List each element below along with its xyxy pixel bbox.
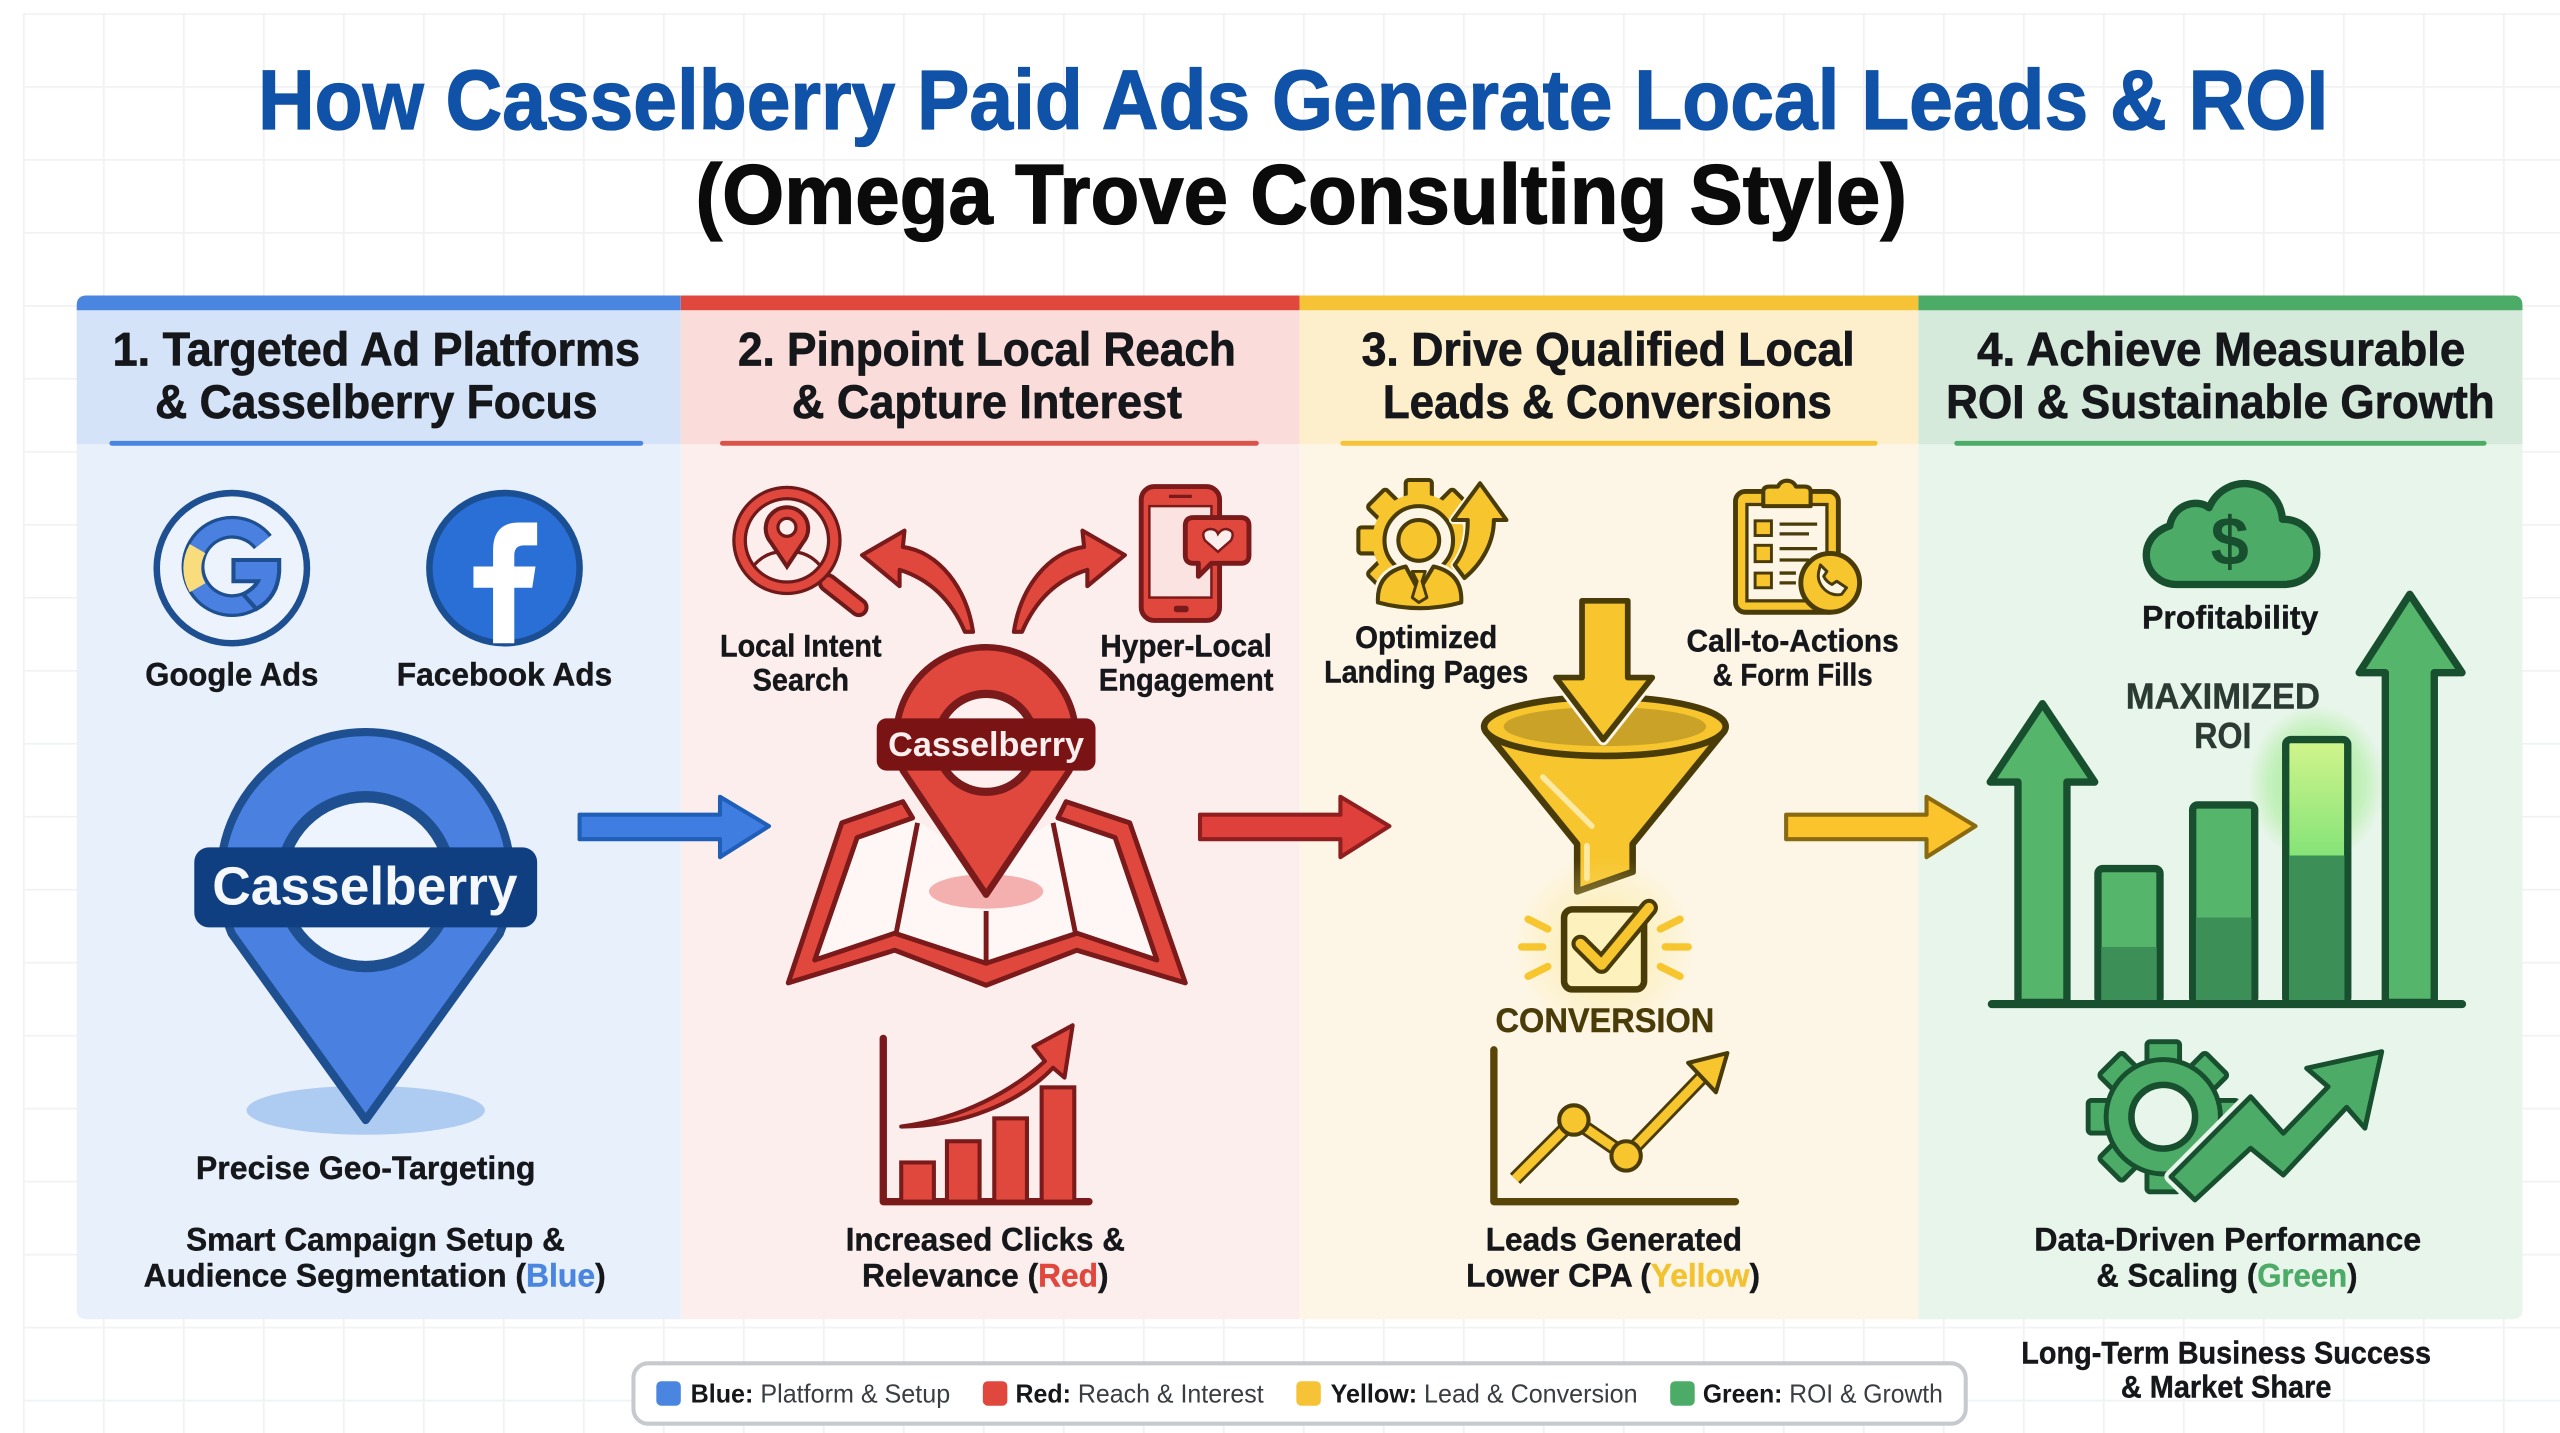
chart: growth bars and arrows	[1990, 594, 2462, 1004]
heading: step 3: 3. Drive Qualified Local	[1362, 324, 1855, 377]
label: local intent search: Search	[753, 662, 849, 698]
heading: step 3	[1362, 324, 1855, 429]
panel: 1 targeted ad platforms (blue)	[77, 296, 681, 1319]
label: conversion: CONVERSION	[1496, 1002, 1714, 1040]
label: profitability: Profitability	[2142, 599, 2318, 636]
label: geo-targeting: Precise Geo-Targeting	[196, 1149, 536, 1186]
arrow: left growth	[1990, 704, 2095, 1002]
panel: 3 drive qualified local leads (yellow)	[1300, 296, 1918, 1319]
legend	[633, 1363, 1966, 1424]
label: call-to-actions	[1687, 622, 1899, 693]
label: optimized landing pages	[1324, 619, 1528, 689]
icon: google ads	[157, 493, 307, 643]
arrow: to local intent search	[862, 531, 973, 632]
heading: step 1: & Casselberry Focus	[155, 376, 598, 429]
caption: blue	[144, 1221, 606, 1294]
icon: clipboard with phone	[1736, 481, 1860, 612]
icon: optimized landing pages gear	[1358, 480, 1506, 608]
bar: glowing tall	[2286, 740, 2348, 1002]
label: maximized roi	[2126, 676, 2320, 756]
label: local intent search	[720, 627, 882, 698]
icon: casselberry map pin	[194, 732, 537, 1135]
arrow: yellow to green	[1786, 797, 1976, 857]
legend item: blue: Blue: Platform & Setup	[691, 1378, 950, 1408]
heading: step 1	[113, 324, 640, 429]
bar: small	[2098, 869, 2160, 1002]
caption: green: Data-Driven Performance	[2034, 1221, 2421, 1258]
label: hyper-local engagement	[1099, 627, 1274, 698]
icon: profit cloud	[2146, 484, 2317, 584]
heading: step 4: 4. Achieve Measurable	[1977, 324, 2465, 377]
caption: yellow: Leads Generated	[1486, 1221, 1742, 1258]
heading: step 2: 2. Pinpoint Local Reach	[738, 324, 1236, 377]
heading: step 2: & Capture Interest	[792, 376, 1182, 429]
label: call-to-actions: & Form Fills	[1713, 657, 1873, 693]
label: local intent search: Local Intent	[720, 627, 882, 663]
caption: blue: Audience Segmentation (Blue)	[144, 1257, 606, 1294]
caption: red	[846, 1221, 1125, 1294]
heading: step 1: 1. Targeted Ad Platforms	[113, 324, 640, 377]
label: hyper-local engagement: Hyper-Local	[1100, 627, 1272, 663]
label: maximized roi: ROI	[2194, 715, 2251, 756]
caption: yellow: Lower CPA (Yellow)	[1466, 1257, 1760, 1294]
icon: casselberry map pin: Casselberry	[888, 726, 1084, 764]
legend item: green: Green: ROI & Growth	[1703, 1378, 1943, 1408]
arrow: right growth	[2359, 594, 2462, 1002]
legend item: yellow: Yellow: Lead & Conversion	[1331, 1378, 1638, 1408]
text block: long-term success: Long-Term Business Success	[2021, 1334, 2431, 1370]
label: google ads: Google Ads	[145, 656, 318, 693]
arrow: blue to red	[580, 797, 769, 857]
label: call-to-actions: Call-to-Actions	[1687, 622, 1899, 658]
icon: folded map	[788, 802, 1185, 985]
caption: green: & Scaling (Green)	[2096, 1257, 2358, 1294]
icon: casselberry map pin	[877, 647, 1096, 895]
heading: step 3: Leads & Conversions	[1383, 376, 1832, 429]
caption: red: Increased Clicks &	[846, 1221, 1125, 1258]
title: (Omega Trove Consulting Style)	[696, 147, 1907, 242]
heading: step 2	[738, 324, 1236, 429]
text block: long-term success: & Market Share	[2121, 1369, 2331, 1405]
label: facebook ads: Facebook Ads	[397, 656, 612, 693]
label: optimized landing pages: Landing Pages	[1324, 653, 1528, 689]
icon: facebook ads	[429, 493, 580, 643]
title: How Casselberry Paid Ads Generate Local Leads & ROI	[258, 52, 2328, 147]
label: hyper-local engagement: Engagement	[1099, 662, 1274, 698]
chart: rising clicks bars	[883, 1025, 1089, 1202]
arrow: to hyper-local engagement	[1014, 531, 1125, 632]
caption: red: Relevance (Red)	[862, 1257, 1109, 1294]
label: optimized landing pages: Optimized	[1355, 619, 1497, 655]
icon: lead funnel	[1484, 601, 1726, 891]
icon: hyper-local engagement phone	[1141, 487, 1249, 620]
legend item: red: Red: Reach & Interest	[1016, 1378, 1264, 1408]
arrow: red to yellow	[1200, 797, 1389, 857]
text block: long-term success	[2021, 1334, 2431, 1405]
icon: gear with zigzag arrow	[2088, 1042, 2382, 1200]
caption: blue: Smart Campaign Setup &	[186, 1221, 565, 1258]
icon: conversion checkbox	[1513, 856, 1696, 1038]
caption: yellow	[1466, 1221, 1760, 1294]
caption: green	[2034, 1221, 2421, 1294]
panel: 4 measurable roi (green)	[1918, 296, 2522, 1319]
title	[258, 52, 2328, 242]
bar: medium	[2193, 805, 2255, 1002]
panel: 2 pinpoint local reach (red)	[681, 296, 1300, 1319]
chart: leads line	[1494, 1050, 1736, 1202]
label: maximized roi: MAXIMIZED	[2126, 676, 2320, 717]
heading: step 4	[1946, 324, 2495, 429]
icon: profit cloud: $	[2211, 503, 2249, 580]
heading: step 4: ROI & Sustainable Growth	[1946, 376, 2495, 429]
icon: casselberry map pin: Casselberry	[212, 857, 518, 917]
icon: local intent search	[740, 493, 859, 607]
